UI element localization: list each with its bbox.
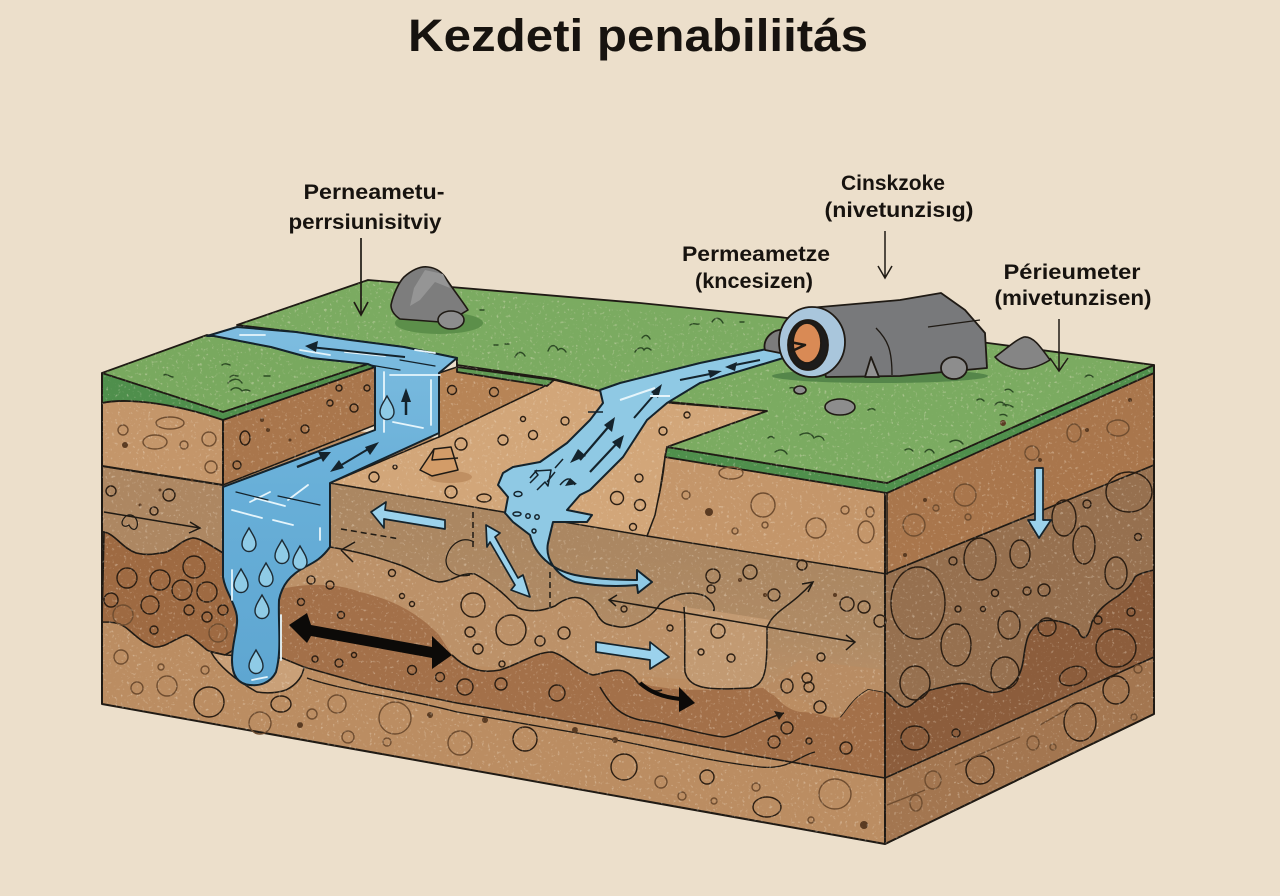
- thin line arrows: [104, 512, 855, 737]
- small rocks on grass: [794, 337, 1050, 415]
- bottom layer pebbles and right face pebbles: [104, 385, 1152, 817]
- title: Kezdeti penabiliitás: [408, 10, 868, 61]
- label: left permeameter: perrsiunisitviy: [288, 211, 442, 234]
- label: right perimeter: [994, 261, 1152, 310]
- label: middle permeameter: [682, 243, 830, 293]
- arrow: top label pointer: [878, 231, 892, 278]
- label: middle permeameter: (kncesizen): [695, 270, 813, 293]
- label: right perimeter: Périeumeter: [1004, 261, 1140, 284]
- front face layer: lighter pocket: [684, 607, 771, 689]
- label: top cinskzoke: Cinskzoke: [841, 172, 945, 195]
- water drops in waterfall: [380, 396, 394, 420]
- front face layer: upper left soil: [102, 401, 223, 485]
- pipe: permeameter cylinder: [764, 293, 988, 383]
- arrow: blue left: [371, 502, 445, 529]
- arrow: black curved: [640, 683, 695, 712]
- light pocket under water plume: [211, 652, 304, 693]
- left dark layer: [102, 532, 262, 680]
- faint pebbles: [113, 417, 1142, 823]
- trench side wall under left grass: [223, 367, 375, 485]
- label: middle permeameter: Permeametze: [682, 243, 830, 266]
- front face layer: tan band: [223, 485, 885, 692]
- arrow: blue right lower: [596, 642, 669, 669]
- water stream and waterfall: [207, 327, 457, 685]
- grass: left block: [102, 335, 375, 420]
- panel: soil block diagram: [100, 267, 1156, 846]
- grass: main back and right block: [237, 280, 1154, 493]
- arrow: blue down on right face: [1028, 468, 1051, 538]
- label: right perimeter: (mivetunzisen): [994, 287, 1152, 310]
- label: top cinskzoke: [824, 172, 974, 222]
- label: left permeameter: [288, 181, 444, 234]
- double arrows on stream: [560, 360, 760, 486]
- panel-level ink outlines: [102, 365, 1154, 844]
- front face layer: upper right soil: [647, 457, 887, 574]
- front face lower tan wedge on the right: [764, 660, 885, 717]
- arrow: right label pointer: [1050, 319, 1068, 371]
- small block on trench floor: [420, 447, 472, 483]
- speck dots: [122, 398, 1132, 829]
- big rock with small rock: [391, 267, 483, 334]
- trench floor: [330, 380, 767, 536]
- grass tufts: [164, 310, 1093, 454]
- trench far wall: [439, 367, 554, 437]
- label: left permeameter: Perneametu-: [304, 181, 444, 204]
- blue flow arrows: [371, 468, 1051, 669]
- arrow: left label pointer: [354, 238, 368, 315]
- front face base layer: [102, 403, 885, 844]
- water surface highlights: [232, 335, 440, 680]
- soil speckle texture: [100, 278, 1156, 846]
- right face soil layers: [885, 373, 1154, 844]
- front face layer: grey-brown band: [102, 466, 223, 554]
- arrows on stream: [297, 341, 411, 472]
- label: top cinskzoke: (nivetunzisıg): [824, 199, 974, 222]
- front face layer: dark brown band: [272, 585, 885, 778]
- floor stream from pipe with curved outflow: [498, 345, 790, 593]
- arrow: black double: [289, 613, 452, 669]
- arrow: blue diagonal double: [486, 525, 530, 597]
